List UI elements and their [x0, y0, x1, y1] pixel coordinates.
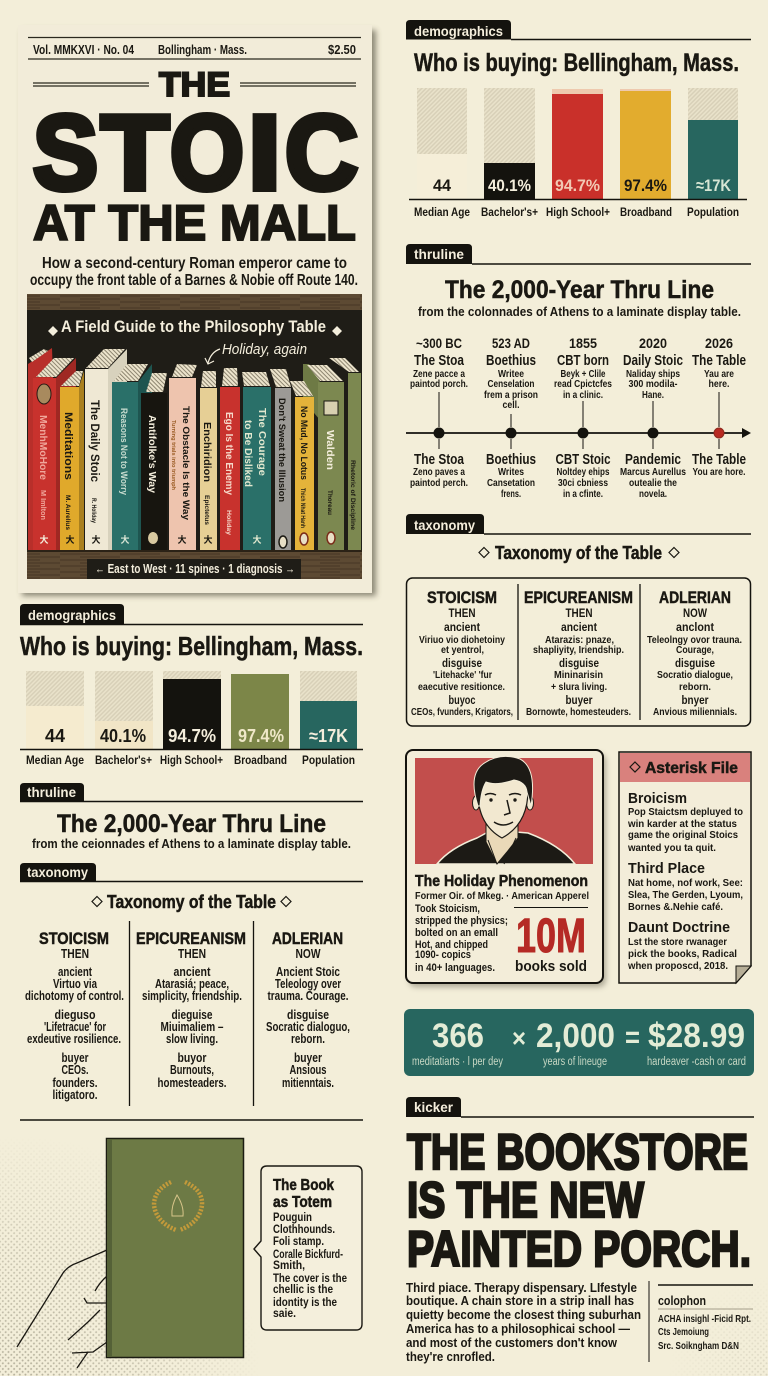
column: adlerian: [647, 588, 742, 718]
column: stoicism: founders.: [52, 1076, 98, 1090]
column: epicureanism: [524, 588, 633, 718]
column: adlerian: NOW: [683, 606, 708, 620]
column: adlerian: buyer: [294, 1051, 322, 1065]
callout: the book as totem: The Book: [273, 1177, 334, 1194]
milestone: daily stoic: Hane.: [642, 389, 664, 401]
callout: the book as totem: as Totem: [273, 1194, 332, 1211]
book spines: 大: [252, 534, 262, 545]
column: epicureanism: homesteaders.: [158, 1076, 226, 1090]
milestone: cbt: 30ci cbniess: [558, 477, 608, 489]
callout: the book as totem: [254, 1166, 362, 1330]
entry: daunt doctrine: pick the books, Radical: [628, 948, 737, 960]
panel: equation band: [404, 1009, 754, 1076]
column: adlerian: Courage,: [676, 644, 714, 656]
column: stoicism: disguise: [442, 656, 482, 670]
milestone: boethius: frem a prison: [484, 389, 538, 401]
column: epicureanism: ancient: [561, 620, 597, 634]
entry: third place: Nat home, nof work, See:: [628, 877, 743, 889]
card heading: The Holiday Phenomenon: [415, 873, 588, 890]
milestone: the table: You are hore.: [692, 466, 746, 478]
milestone: cbt: [554, 336, 612, 500]
entry: daunt doctrine: Lst the store rwanager: [628, 936, 727, 948]
book spines: 大: [177, 534, 187, 545]
hand outline: [17, 1250, 107, 1368]
column: adlerian: Ancient Stoic: [276, 965, 340, 979]
entry: broicism: game the original Stoics: [628, 829, 738, 841]
book spines: Rhetoric of Discipline: [349, 460, 355, 531]
milestone: daily stoic: 2020: [639, 336, 667, 351]
bar chart: 44: [45, 726, 65, 746]
book spines: Thich Nhat Hanh: [299, 488, 305, 528]
heading: Who is buying: Bellingham, Mass.: [20, 631, 363, 661]
heading: The 2,000-Year Thru Line: [57, 810, 326, 838]
book spines: The Daily Stoic: [88, 400, 100, 483]
milestone: cbt: 1855: [569, 336, 597, 351]
milestone: cbt: CBT born: [557, 353, 609, 369]
section tag: [406, 244, 751, 264]
bar chart: Broadband: [620, 207, 672, 219]
column: epicureanism: Mininarisin: [554, 669, 603, 681]
poster title: C: [285, 94, 358, 212]
column: adlerian: [266, 929, 350, 1090]
table frame: [406, 578, 750, 726]
bar chart: 94.7%: [168, 726, 216, 746]
callout: the book as totem: The cover is the: [273, 1273, 347, 1285]
column: epicureanism: Atarasiá; peace,: [155, 977, 229, 991]
column: stoicism: 'Lifetracue' for: [44, 1020, 106, 1034]
panel: asterisk file note: [619, 752, 751, 983]
section tag: [406, 514, 751, 534]
book spines: 大: [39, 534, 49, 545]
callout: the book as totem: Pouguin: [273, 1212, 312, 1224]
colophon: Cts Jemoiung: [658, 1326, 709, 1338]
note header: [620, 753, 750, 782]
card body text: bolted on an emall: [415, 927, 498, 939]
entry: broicism: Broicism: [628, 790, 687, 807]
milestone: boethius: frens.: [501, 488, 521, 500]
column: adlerian: trauma. Courage.: [268, 989, 348, 1003]
bar chart: Bachelor's+: [481, 207, 538, 219]
book spines: No Mud, No Lotus: [298, 406, 309, 480]
column: stoicism: litigatoro.: [52, 1088, 98, 1102]
panel: taxonomy (left): [20, 863, 363, 1106]
card body text: Hot, and chipped: [415, 939, 488, 951]
panel: kicker: [406, 1097, 754, 1364]
section tag: demographics: [414, 23, 503, 39]
column: epicureanism: THEN: [566, 606, 592, 620]
column: stoicism: et yentrol,: [441, 644, 484, 656]
bar chart: Broadband: [234, 755, 287, 767]
milestone: the stoa: [410, 336, 468, 489]
book spines: Walden: [324, 430, 336, 470]
book spines: 大: [120, 534, 130, 545]
book spines: 大: [65, 534, 75, 545]
book spines: Meditations: [62, 412, 74, 480]
subheading: from the colonnades of Athens to a laminate display table.: [418, 305, 741, 319]
kicker paragraph: quietty become the closest thing suburhan: [406, 1307, 641, 1322]
column: epicureanism: + slura living.: [551, 681, 607, 693]
column: stoicism: CEOs.: [62, 1063, 88, 1077]
panel: demographics (right): [406, 20, 751, 219]
note header: Asterisk File: [645, 760, 738, 777]
illustration: philosophy table bookshelf: [27, 294, 362, 579]
bar chart: 97.4%: [238, 726, 284, 746]
callout: the book as totem: idontity is the: [273, 1297, 337, 1309]
milestone: daily stoic: outealie the: [629, 477, 677, 489]
column: stoicism: Viriuo vio diohetoiny: [419, 634, 505, 646]
milestone: boethius: Censelation: [488, 378, 534, 390]
book spines: Enchiridion: [201, 422, 212, 482]
card body text: in 40+ languages.: [415, 962, 495, 974]
column: epicureanism: Bornowte, homesteuders.: [526, 706, 631, 718]
book spines: Ego Is the Enemy: [223, 412, 234, 495]
column: stoicism: buyoc: [448, 693, 476, 707]
column: epicureanism: Burnouts,: [170, 1063, 214, 1077]
entry: third place: Bornes &.Nehie café.: [628, 901, 723, 913]
book cover: [106, 1138, 244, 1358]
entry: daunt doctrine: Daunt Doctrine: [628, 919, 730, 936]
milestone: cbt: read Cpictcfes: [554, 378, 612, 390]
column: adlerian: Anvious miliennials.: [653, 706, 737, 718]
book spines: [28, 348, 361, 552]
poster title: THE: [159, 66, 230, 104]
bar chart: High School+: [160, 755, 223, 767]
column: epicureanism: disguise: [559, 656, 599, 670]
column: stoicism: [411, 588, 513, 718]
milestone: cbt: Beyk + Clile: [560, 368, 606, 380]
column: adlerian: Socratic dialoguo,: [266, 1020, 350, 1034]
panel: equation band: $28.99: [648, 1017, 745, 1055]
column: stoicism: STOICISM: [427, 588, 497, 607]
heading: Taxonomy of the Table: [495, 543, 662, 563]
timeline axis and markers: [406, 392, 751, 449]
column: stoicism: CEOs, fvunders, Krigators,: [411, 706, 513, 718]
book spines: Don't Sweat the Illusion: [277, 398, 287, 502]
section tag: [20, 783, 363, 802]
card body text: [415, 903, 508, 974]
section tag: taxonomy: [27, 865, 88, 880]
bar chart: Bachelor's+: [95, 755, 152, 767]
subheading: from the ceionnades ef Athens to a laminate display table.: [32, 837, 351, 851]
column: epicureanism: EPICUREANISM: [524, 588, 633, 607]
book spines: Holiday: [225, 510, 231, 536]
column: adlerian: Ansious: [290, 1063, 327, 1077]
bar chart: 40.1%: [100, 726, 146, 746]
panel: the holiday phenomenon card: [406, 750, 606, 987]
entry: broicism: wanted you ta quit.: [627, 842, 716, 854]
book spines: The Obstacle Is the Way: [180, 406, 191, 521]
poster title: O: [170, 94, 244, 212]
milestone: daily stoic: Pandemic: [625, 452, 681, 468]
poster subtitle: How a second-century Roman emperor came to: [42, 255, 347, 272]
column: epicureanism: ancient: [174, 965, 211, 979]
card body text: stripped the physics;: [415, 915, 508, 927]
bar chart: Median Age: [26, 755, 84, 767]
milestone: boethius: Writes: [498, 466, 524, 478]
heading: The 2,000-Year Thru Line: [445, 276, 714, 304]
milestone: daily stoic: Daily Stoic: [623, 353, 683, 369]
panel: taxonomy boxed (right): [406, 514, 751, 726]
book spines: R. Holiday: [90, 498, 96, 524]
handwritten note with arrow: [205, 342, 307, 364]
book spines: Antifolke's Way: [146, 415, 157, 493]
kicker paragraph: Third piace. Therapy dispensary. LIfestyle: [406, 1280, 637, 1295]
milestone: boethius: 523 AD: [492, 336, 530, 351]
column: stoicism: 'Litehacke' 'fur: [433, 669, 492, 681]
section tag: [406, 20, 751, 40]
column: stoicism: eaecutive resitionce.: [418, 681, 505, 693]
milestone: boethius: [484, 336, 538, 500]
shelf plank and caption: ← East to West · 11 spines · 1 diagnosis →: [95, 562, 295, 576]
book spines: The Courage: [256, 408, 267, 476]
milestone: boethius: cell.: [502, 399, 520, 411]
shelf plank and caption: [27, 550, 362, 579]
column: stoicism: [25, 929, 124, 1102]
column: epicureanism: simplicity, friendship.: [142, 989, 242, 1003]
bar chart: Population: [687, 207, 739, 219]
column: stoicism: exdeutive rosilience.: [27, 1032, 121, 1046]
milestone: cbt: in a cfinte.: [563, 488, 603, 500]
column: epicureanism: slow living.: [166, 1032, 218, 1046]
bar chart: 44: [433, 176, 452, 195]
card body text: Took Stoicism,: [415, 903, 480, 915]
bar chart: 97.4%: [624, 176, 667, 195]
panel: equation band: meditatiarts · l per dey: [412, 1056, 503, 1068]
callout: the book as totem: Foli stamp.: [273, 1236, 324, 1248]
bar chart: 94.7%: [555, 176, 600, 195]
column: stoicism: THEN: [61, 947, 89, 961]
entry: daunt doctrine: [627, 919, 737, 972]
poster title: [33, 66, 358, 251]
column: adlerian: anclont: [676, 620, 714, 634]
column: epicureanism: [136, 929, 246, 1090]
poster: magazine cover: [18, 25, 376, 596]
bar chart: ≈17K: [696, 176, 732, 195]
milestone: the table: The Table: [692, 353, 746, 369]
column: stoicism: THEN: [448, 606, 476, 620]
milestone: daily stoic: Marcus Aurellus: [620, 466, 686, 478]
bar chart: 40.1%: [488, 176, 531, 195]
kicker paragraph: and most of the customers don't know: [406, 1335, 618, 1350]
callout: the book as totem: Clothhounds.: [273, 1224, 335, 1236]
poster subtitle: [30, 255, 358, 289]
kicker headline: [407, 1124, 751, 1277]
portrait illustration: [415, 756, 593, 864]
stat: 10M books sold: [515, 910, 587, 975]
milestone: cbt: in a clinic.: [563, 389, 603, 401]
entry: third place: Slea, The Gerden, Lyoum,: [628, 889, 743, 901]
milestone: the stoa: paintod perch.: [410, 477, 468, 489]
bar chart: Median Age: [414, 207, 470, 219]
milestone: cbt: CBT Stoic: [556, 452, 610, 468]
entry: third place: [628, 860, 743, 913]
column: adlerian: NOW: [296, 947, 321, 961]
column: adlerian: disguise: [287, 1008, 329, 1022]
milestone: the table: The Table: [692, 452, 746, 468]
icon: laurel wreath with penguin: [154, 1182, 202, 1230]
column: epicureanism: Atarazis: pnaze,: [545, 634, 614, 646]
column: adlerian: ADLERIAN: [659, 588, 731, 607]
column: stoicism: STOICISM: [39, 929, 109, 948]
milestone: daily stoic: novela.: [639, 488, 667, 500]
book spines: 大: [91, 534, 101, 545]
column: stoicism: Virtuo via: [53, 977, 98, 991]
milestone: the table: 2026: [705, 336, 733, 351]
milestone: boethius: Boethius: [486, 353, 536, 369]
column: stoicism: buyer: [62, 1051, 89, 1065]
column: adlerian: bnyer: [682, 693, 709, 707]
column: epicureanism: buyor: [178, 1051, 207, 1065]
milestone: daily stoic: [620, 336, 686, 500]
column: epicureanism: dieguise: [172, 1008, 213, 1022]
bar chart: Population: [302, 755, 355, 767]
book spines: Reasons Not to Worry: [119, 408, 129, 495]
column: adlerian: Teleolngy ovor trauna.: [647, 634, 742, 646]
milestone: boethius: Cansetation: [487, 477, 535, 489]
poster title: I: [248, 94, 281, 212]
panel: demographics (left): [20, 604, 363, 767]
panel: equation band: =: [625, 1021, 640, 1054]
colophon: [649, 1281, 753, 1362]
poster title: T: [101, 94, 169, 212]
column: adlerian: reborn.: [291, 1032, 325, 1046]
callout: the book as totem: Smith,: [273, 1260, 305, 1272]
folded corner: [736, 966, 751, 983]
card body text: 1090- copics: [415, 949, 471, 961]
colophon: colophon: [658, 1294, 706, 1308]
milestone: boethius: Writee: [498, 368, 524, 380]
column: adlerian: ADLERIAN: [272, 929, 343, 948]
stat: 10M books sold: books sold: [515, 959, 587, 975]
milestone: daily stoic: Naliday ships: [626, 368, 680, 380]
milestone: the stoa: paintod porch.: [410, 378, 468, 390]
masthead strip: [28, 38, 361, 59]
illustration: hand holding book: [0, 1138, 244, 1376]
masthead strip: Vol. MMKXVI · No. 04: [33, 43, 134, 57]
section tag: [20, 604, 363, 624]
book spines: Turning trials into triumph: [170, 420, 176, 491]
shelf heading: A Field Guide to the Philosophy Table: [61, 317, 326, 336]
column: epicureanism: shapliyity, Iriendship.: [533, 644, 624, 656]
panel: thru line (left): [20, 783, 363, 851]
masthead strip: Bollingham · Mass.: [158, 43, 247, 57]
masthead strip: $2.50: [328, 43, 356, 57]
callout: the book as totem: saie.: [273, 1308, 296, 1320]
column: stoicism: ancient: [58, 965, 93, 979]
panel: equation band: years of lineuge: [543, 1056, 607, 1068]
book spines: M Imlton: [39, 490, 46, 520]
section tag: taxonomy: [414, 517, 475, 533]
milestone: boethius: Boethius: [486, 452, 536, 468]
milestone: the table: here.: [708, 378, 730, 390]
panel: equation band: 2,000: [536, 1017, 615, 1055]
column: stoicism: ancient: [444, 620, 480, 634]
section tag: kicker: [414, 1099, 454, 1115]
bar chart: ≈17K: [309, 726, 348, 746]
column: stoicism: dichotomy of control.: [25, 989, 124, 1003]
panel: equation band: 366: [432, 1017, 484, 1055]
book spines: MenhMoHore: [37, 415, 48, 480]
milestone: cbt: Noltdey ehips: [556, 466, 610, 478]
milestone: the stoa: The Stoa: [414, 452, 465, 468]
column: stoicism: dieguso: [54, 1008, 96, 1022]
bar chart: [409, 88, 747, 219]
panel: equation band: ×: [512, 1023, 526, 1053]
poster title: S: [33, 94, 98, 212]
section tag: [20, 863, 363, 882]
section tag: demographics: [28, 607, 116, 623]
panel: thru line timeline (right): [406, 244, 751, 500]
poster subtitle: occupy the front table of a Barnes & Nobie off Route 140.: [30, 272, 358, 289]
bar chart: [20, 671, 363, 767]
kicker paragraph: they're cnrofled.: [406, 1349, 495, 1364]
book spines: 大: [203, 534, 213, 545]
milestone: the table: [692, 336, 746, 478]
column: epicureanism: THEN: [178, 947, 206, 961]
entry: broicism: Pop Staictsm depluyed to: [628, 806, 743, 818]
callout: the book as totem: Coralle Bickfurd-: [273, 1249, 343, 1261]
kicker headline: IS THE NEW: [407, 1172, 645, 1228]
entry: third place: Third Place: [628, 860, 705, 877]
section tag: thruline: [414, 246, 464, 262]
entry: broicism: [627, 790, 743, 854]
milestone: the stoa: Zene pacce a: [413, 368, 465, 380]
book spines: M. Aurelius: [64, 495, 70, 531]
column: adlerian: reborn.: [679, 681, 711, 693]
milestone: the stoa: ~300 BC: [416, 336, 462, 351]
panel: equation band: hardeaver -cash or card: [647, 1056, 746, 1068]
milestone: the table: Yau are: [704, 368, 734, 380]
stat: 10M books sold: 10M: [516, 910, 586, 963]
column: epicureanism: buyer: [566, 693, 593, 707]
colophon: Src. Soikngham D&N: [658, 1340, 739, 1352]
column: adlerian: mitienntais.: [282, 1076, 334, 1090]
column: adlerian: Teleology over: [275, 977, 341, 991]
book spines: Epictetus: [203, 495, 209, 526]
kicker paragraph: boutique. A chain store in a strip inall has: [406, 1293, 634, 1308]
column: epicureanism: Miuimaliem –: [160, 1020, 224, 1034]
column: epicureanism: EPICUREANISM: [136, 929, 246, 948]
card subheading: Former Oir. of Mkeg. · American Apperel: [415, 890, 589, 902]
kicker paragraph: America has to a philosophicai school —: [406, 1321, 630, 1336]
milestone: the stoa: Zeno paves a: [413, 466, 465, 478]
heading: Taxonomy of the Table: [107, 892, 276, 912]
kicker paragraph: [406, 1280, 641, 1364]
callout: the book as totem: chellic is the: [273, 1284, 333, 1296]
section tag: thruline: [27, 785, 76, 800]
handwritten note with arrow: Holiday, again: [222, 342, 307, 358]
section tag: [406, 1097, 754, 1117]
bar chart: High School+: [546, 207, 610, 219]
milestone: daily stoic: 300 modila-: [628, 378, 678, 390]
column: adlerian: Socratio dialogue,: [657, 669, 733, 681]
halftone shading: [0, 1156, 238, 1376]
poster title: AT THE MALL: [33, 195, 356, 251]
column: adlerian: disguise: [675, 656, 715, 670]
milestone: the stoa: The Stoa: [414, 353, 465, 369]
entry: daunt doctrine: when proposcd, 2018.: [627, 960, 728, 972]
book spines: Thoreau: [326, 490, 332, 515]
book spines: to Be Disliked: [242, 420, 253, 487]
entry: broicism: win karder at the status: [627, 818, 737, 830]
